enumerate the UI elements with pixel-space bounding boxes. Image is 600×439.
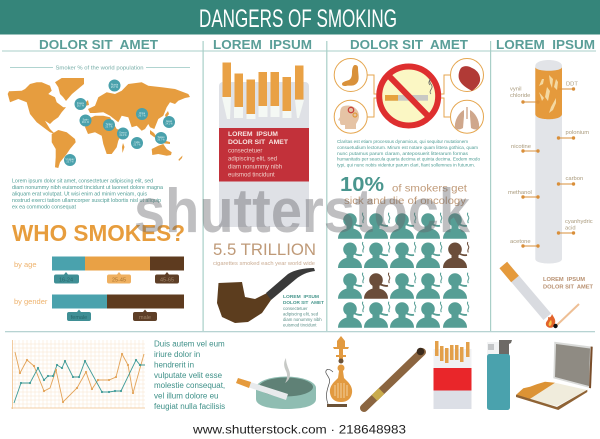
age label 16-24: 16-24	[59, 278, 73, 284]
text block: chart note: vel illum dolore eu	[154, 392, 218, 400]
text block: world paragraph: diam nonummy nibh euismod tincidunt ut laoreet dolore magna	[12, 185, 163, 191]
text block: pipe note: LOREM IPSUM	[283, 294, 319, 299]
teal series	[14, 360, 145, 403]
age label 45-65	[155, 272, 179, 284]
text block: world paragraph: Lorem ipsum dolor sit amet, consectetuer adipiscing elit, sed	[12, 178, 153, 184]
text block: cigarette note: DOLOR SIT AMET	[543, 284, 594, 290]
marker labels: 24.1 %	[165, 124, 173, 126]
text block: pipe note: adipiscing elit, sed	[283, 312, 319, 316]
gender label female: female	[71, 315, 87, 321]
marker labels: 25.7 %	[66, 162, 74, 164]
red label: adipiscing elit, sed	[228, 157, 277, 163]
marker labels: 25.7 %	[133, 144, 141, 146]
cigarette tips	[222, 62, 304, 114]
heading: who smokes: WHO SMOKES?	[12, 220, 185, 246]
callout labels: carbon	[566, 176, 583, 182]
icon: red cigarette pack	[434, 341, 472, 409]
series points	[19, 353, 134, 403]
marker labels: China	[139, 113, 146, 115]
stat: 10 percent: 10%	[340, 173, 384, 196]
panel: organs and no smoking sign	[334, 58, 484, 133]
section rules	[2, 41, 596, 332]
text block: cigarette note: LOREM IPSUM	[543, 277, 585, 283]
icon: burning cigarette and match	[503, 265, 579, 328]
callout labels: methanol	[508, 190, 532, 196]
text block: pipe note: euismod tincidunt	[283, 322, 317, 328]
gender label male: male	[139, 315, 151, 321]
icon: pipe	[217, 268, 315, 323]
icon: lighter	[487, 340, 512, 410]
world map	[8, 78, 190, 168]
marker labels: Taiwan	[157, 137, 165, 139]
red label	[219, 128, 309, 182]
heading: fourth column: LOREM IPSUM	[496, 37, 595, 52]
text block: organ paragraph	[337, 139, 480, 168]
stat: 5.5 trillion	[213, 240, 316, 267]
marker labels: 26.7 %	[157, 140, 165, 142]
text block: world paragraph: aliquam erat volutpat. Ut wisi enim ad minim veniam, quis	[12, 192, 147, 198]
callout labels	[508, 82, 593, 245]
text block: chart note: vulputate velit esse	[154, 371, 223, 380]
map markers	[64, 80, 175, 166]
chart: by age: by age	[14, 260, 37, 269]
panel: cigarette ingredients	[508, 60, 593, 264]
callout labels: polonium	[566, 130, 589, 136]
chart: by gender	[14, 294, 184, 321]
icon: heart	[459, 66, 480, 91]
icon: hookah	[326, 336, 352, 407]
text block: organ paragraph: Claritas est etiam processus dynamicus, qui sequitur mutationem	[337, 139, 468, 145]
marker labels: Japan	[166, 121, 173, 123]
heading: left column: DOLOR SIT AMET	[39, 37, 158, 52]
age label 45-65: 45-65	[160, 278, 174, 284]
callout labels: DDT	[566, 82, 578, 88]
text block: pipe note: diam nonummy nibh	[283, 317, 322, 322]
footer: image credit: www.shutterstock.com · 218648983	[192, 422, 406, 436]
callout lines	[523, 89, 573, 246]
pictogram: smokers	[338, 213, 469, 328]
stat: 10 percent: of smokers get	[392, 184, 467, 194]
callout labels: vynil	[510, 86, 522, 92]
white filters	[222, 97, 304, 119]
stat: 5.5 trillion: cigarettes smoked each year world wide	[213, 261, 315, 267]
marker labels: Greece	[119, 132, 127, 134]
text block: chart note: molestie consequat,	[154, 381, 225, 390]
callout labels: cyanhydric	[565, 219, 593, 225]
age label 16-24	[54, 272, 79, 284]
icon: stomach	[342, 65, 359, 86]
orange series	[15, 352, 144, 402]
text block: organ paragraph: typi, qui nunc nobis videntur parum clari, fiant sollemnes in futurum.	[337, 162, 475, 168]
heading: second column: LOREM IPSUM	[213, 37, 312, 52]
age label 25-45: 25-45	[112, 278, 126, 284]
watermark: shutterstock: shutterstock	[134, 177, 470, 246]
text block: world paragraph: ex ea commodo consequat	[12, 204, 76, 210]
red label: DOLOR SIT AMET	[228, 140, 288, 146]
line chart	[11, 340, 145, 409]
icon: ashtray	[236, 358, 316, 409]
red label: euismod tincidunt	[228, 173, 275, 179]
chart: by gender: by gender	[14, 297, 48, 306]
icon: open cigarette box	[516, 342, 593, 410]
marker labels: Spain	[83, 120, 89, 122]
header band	[0, 0, 600, 34]
marker labels: 25.7 %	[105, 126, 113, 128]
gender label male	[133, 310, 157, 321]
age label 25-45	[107, 272, 131, 284]
text block: pipe note: DOLOR SIT AMET	[283, 300, 324, 305]
text block: pipe note: consectetuer	[283, 306, 308, 311]
text block: chart note: Duis autem vel eum	[154, 340, 225, 348]
marker labels: Uruguay	[66, 158, 75, 161]
marker labels: 28.1 %	[82, 122, 89, 124]
text block: chart note: hendrerit in	[154, 360, 194, 370]
stat: 10 percent: sick and die of oncology	[344, 196, 466, 207]
gender label female	[67, 310, 91, 321]
text block: chart note: feugiat nulla facilisis	[154, 402, 225, 411]
marker labels	[66, 84, 173, 164]
panel: cigarette pack	[219, 62, 309, 227]
callout dots	[521, 87, 575, 248]
callout labels: acetone	[510, 239, 531, 245]
marker labels: Russia	[111, 84, 119, 86]
text block: pipe note	[283, 294, 324, 328]
marker labels: India	[135, 142, 140, 144]
text block: organ paragraph: nunc putamus parum claram, anteposuerit litterarum formas	[337, 151, 469, 157]
icon: head	[338, 106, 359, 129]
stat: 10 percent	[340, 173, 467, 207]
grid	[12, 340, 145, 408]
marker labels: 26.7 %	[138, 116, 146, 118]
red label: diam nonummy nibh	[228, 165, 282, 171]
red label: LOREM IPSUM	[228, 132, 278, 138]
callout labels: nicotine	[511, 144, 531, 150]
panel: world population map	[8, 66, 190, 168]
icon: cigar	[364, 348, 424, 408]
chart: by age	[14, 256, 184, 284]
title: DANGERS OF SMOKING	[199, 5, 397, 33]
marker labels: 26.7 %	[77, 106, 84, 108]
stat: 5.5 trillion: 5.5 TRILLION	[213, 240, 316, 259]
map title: Smoker % of the world population	[56, 66, 144, 72]
marker labels: 31.2 %	[119, 135, 127, 137]
organ rings	[334, 58, 484, 133]
callout labels: acid	[565, 226, 576, 232]
cigarette filter	[535, 67, 562, 119]
icon: no smoking sign	[379, 66, 438, 126]
cigarette body	[535, 60, 562, 264]
text block: organ paragraph: consuetudium lectorum. Mirum est notare quam littera gothica, quam	[337, 145, 478, 151]
callout labels: chloride	[510, 93, 530, 99]
marker labels: Turkey	[106, 123, 113, 126]
text block: cigarette note	[543, 277, 594, 290]
text block: world paragraph: nostrud exerci tation ullamcorper suscipit lobortis nisl ut aliquip	[12, 198, 161, 204]
icon: lungs	[455, 107, 479, 130]
heading: third column: DOLOR SIT AMET	[350, 37, 468, 52]
red label: consectetuer	[228, 148, 262, 154]
text block: chart note	[154, 340, 225, 411]
text block: chart note: iriure dolor in	[154, 350, 200, 359]
marker labels: France	[77, 102, 85, 105]
text block: world paragraph	[12, 178, 163, 210]
connectors	[367, 75, 451, 117]
text block: organ paragraph: humanitatis per seacula quarta decima et quinta decima. Eodem modo	[337, 157, 480, 163]
marker labels: 25.7 %	[111, 87, 118, 89]
